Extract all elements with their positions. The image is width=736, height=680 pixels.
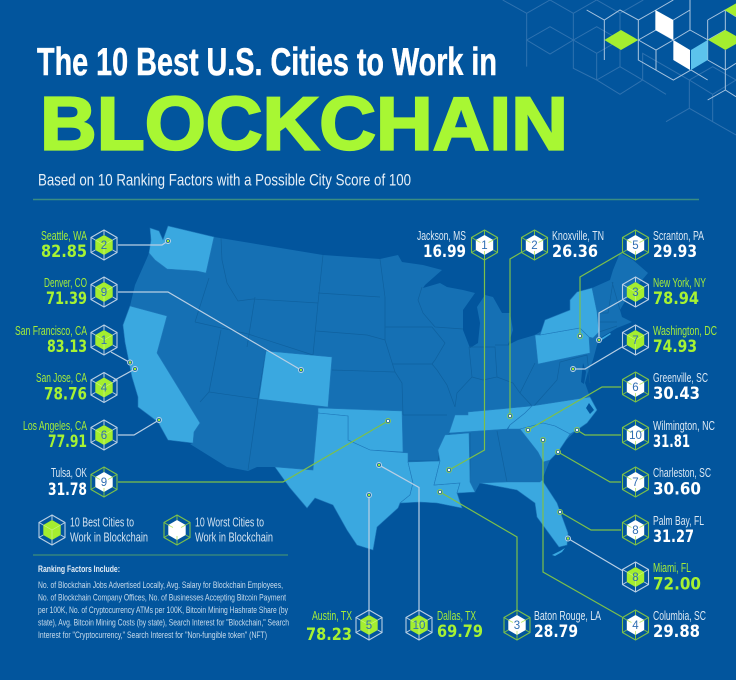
city: Denver: 71.39 [46, 289, 87, 308]
legend: best cities: Work in Blockchain [70, 530, 148, 544]
city: Dallas: 10 [413, 620, 425, 632]
subtitle: Based on 10 Ranking Factors with a Possible City Score of 100 [38, 170, 411, 190]
city: Tulsa: 9 [101, 477, 107, 489]
title keyword: BLOCKCHAIN [40, 82, 568, 166]
city: Columbia: 29.88 [653, 622, 700, 641]
city: Scranton: 5 [632, 240, 639, 252]
city: Baton Rouge: 3 [514, 620, 520, 632]
city: Charleston: Charleston, SC [653, 466, 711, 480]
highlighted state: Tennessee [449, 406, 532, 433]
legend: best cities: 10 Best Cities to [70, 514, 134, 530]
legend: best cities [39, 514, 148, 545]
ranking factors text: No. of Blockchain Company Offices, No. of Businesses Accepting Bitcoin Payment [38, 592, 286, 602]
highlighted state: Colorado [259, 351, 332, 407]
city: Scranton: 29.93 [653, 242, 697, 261]
city: Baton Rouge: 28.79 [534, 622, 578, 641]
city: Washington DC: 74.93 [653, 337, 697, 356]
ranking factors text: No. of Blockchain Jobs Advertised Locally, Avg. Salary for Blockchain Employees, [38, 580, 283, 590]
city: Jackson: 16.99 [423, 242, 466, 261]
highlighted state: Pennsylvania [535, 328, 590, 364]
city: San Francisco: San Francisco, CA [15, 324, 87, 338]
city: Charleston [622, 466, 711, 498]
city: Baton Rouge [504, 609, 601, 641]
city: San Jose: San Jose, CA [36, 371, 87, 385]
highlighted state: Oklahoma [318, 408, 403, 452]
ranking factors text [38, 580, 289, 640]
city: New York: New York, NY [653, 276, 706, 290]
city: Austin: Austin, TX [312, 609, 352, 623]
highlighted state: New York [540, 288, 599, 338]
city: Seattle [41, 229, 117, 261]
title line: The 10 Best U.S. Cities to Work in [37, 41, 497, 84]
ranking factors text: per 100K, No. of Cryptocurrency ATMs per 100K, Bitcoin Mining Hashrate Share (by [38, 605, 288, 615]
city: Greenville: 6 [632, 382, 639, 394]
city: Miami: Miami, FL [653, 561, 691, 575]
city: Wilmington: 31.81 [653, 432, 690, 451]
connector end dots [128, 238, 602, 541]
ranking factors text: state), Avg. Bitcoin Mining Costs (by state), Search Interest for "Blockchain," Search [38, 618, 289, 628]
city: Wilmington: 10 [629, 430, 642, 442]
city: Knoxville: 26.36 [552, 242, 598, 261]
city: Austin [306, 609, 382, 644]
city: Scranton [622, 229, 704, 261]
city: Columbia: Columbia, SC [653, 609, 706, 623]
city: Austin: 5 [366, 620, 372, 632]
city: Columbia [622, 609, 706, 641]
city: New York: 3 [632, 287, 639, 299]
city: Palm Bay: 8 [632, 525, 639, 537]
city: Los Angeles: 77.91 [48, 432, 87, 451]
city: Wilmington [622, 419, 715, 451]
city: San Jose: 78.76 [44, 384, 87, 404]
city: San Francisco [15, 324, 117, 356]
city: Miami [622, 561, 701, 594]
US map [123, 226, 648, 556]
city: Charleston: 30.60 [653, 480, 701, 498]
city: Austin: 78.23 [306, 625, 352, 644]
city: Los Angeles: Los Angeles, CA [23, 419, 87, 433]
city: Seattle: 82.85 [41, 242, 87, 261]
city: Jackson: 1 [481, 240, 488, 252]
city: Seattle: 2 [101, 240, 107, 252]
city: Jackson: Jackson, MS [417, 229, 466, 243]
city: Seattle: Seattle, WA [41, 229, 87, 243]
city: Knoxville: Knoxville, TN [552, 229, 604, 243]
highlighted state: Louisiana [400, 461, 462, 508]
hexagon network decoration [503, 0, 736, 135]
city: Baton Rouge: Baton Rouge, LA [534, 609, 601, 623]
city: Greenville: Greenville, SC [653, 371, 708, 385]
ranking factors text: Interest for "Cryptocurrency," Search Interest for "Non-fungible token" (NFT) [38, 630, 267, 640]
connector lines [111, 241, 623, 617]
base map [123, 226, 648, 550]
city: Knoxville: 2 [531, 240, 538, 252]
city: New York: 78.94 [653, 289, 699, 308]
city: Dallas: Dallas, TX [437, 609, 476, 623]
city: Jackson [417, 229, 498, 261]
legend: worst cities [164, 514, 273, 545]
city: Washington DC [622, 324, 717, 356]
city: Palm Bay [622, 514, 704, 546]
city: San Jose [36, 371, 117, 404]
highlighted state: North Carolina [508, 397, 597, 434]
city: San Francisco: 83.13 [47, 337, 87, 356]
city: Dallas: 69.79 [437, 622, 483, 641]
city: Los Angeles [23, 419, 117, 451]
city: Denver: Denver, CO [44, 276, 87, 290]
highlighted state: Mississippi [434, 433, 475, 493]
city: Tulsa: Tulsa, OK [51, 466, 87, 480]
legend: worst cities: 10 Worst Cities to [195, 514, 264, 530]
city: Knoxville [522, 229, 604, 261]
city: San Francisco: 1 [101, 335, 107, 347]
highlighted state: Washington [149, 226, 214, 273]
city: Dallas [406, 609, 483, 641]
city: Denver: 9 [101, 287, 107, 299]
highlighted state: Florida [480, 480, 568, 547]
highlighted state: South Carolina [520, 423, 570, 462]
city: Greenville: 30.43 [653, 384, 700, 403]
city: Denver [44, 276, 117, 308]
city: Palm Bay: Palm Bay, FL [653, 514, 704, 528]
city: Washington DC: 7 [632, 335, 639, 347]
legend: worst cities: Work in Blockchain [195, 530, 273, 544]
city: Greenville [622, 371, 708, 403]
city: San Jose: 4 [101, 382, 108, 394]
city: Tulsa [48, 466, 117, 499]
city: Columbia: 4 [632, 620, 639, 632]
city: Charleston: 7 [632, 477, 639, 489]
city: Palm Bay: 31.27 [653, 527, 694, 546]
city: Los Angeles: 6 [101, 430, 107, 442]
city: Scranton: Scranton, PA [653, 229, 704, 243]
city: Tulsa: 31.78 [48, 480, 87, 499]
ranking factors heading: Ranking Factors Include: [38, 564, 120, 575]
city: New York [622, 276, 706, 308]
city: Miami: 72.00 [653, 574, 701, 594]
city: Miami: 8 [632, 572, 639, 584]
state borders [195, 238, 620, 482]
highlighted state: California [123, 306, 200, 443]
highlighted state: Texas [275, 413, 413, 550]
